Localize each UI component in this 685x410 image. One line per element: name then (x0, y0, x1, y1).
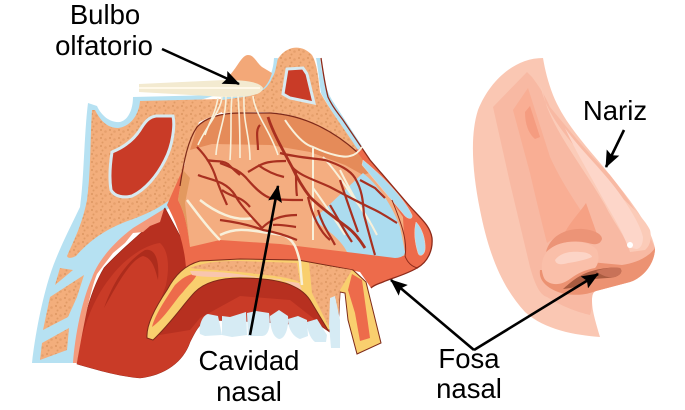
bridge highlight (540, 83, 651, 252)
throat fold (104, 250, 158, 308)
nose cartilage line (392, 200, 418, 268)
frontal bone (67, 99, 222, 258)
tip highlight dot (627, 242, 633, 248)
nostril inner tone (596, 268, 621, 277)
nostril fold (546, 229, 602, 252)
label: Cavidad nasal: nasal (216, 376, 282, 407)
olfactory nerve fan (198, 96, 278, 160)
mid skin layer (493, 72, 655, 315)
label: Nariz: Nariz (583, 95, 647, 126)
label: Fosa nasal: Fosa (438, 343, 500, 374)
arrow: olfactory bulb (162, 49, 239, 84)
nostril opening (563, 268, 621, 289)
upper mucosa band (190, 113, 372, 175)
palate yellow bone (147, 259, 381, 354)
premaxilla bone (309, 263, 352, 330)
arrow: nostril right (474, 274, 598, 350)
teeth (200, 296, 340, 348)
olfactory nerve bundle (139, 80, 263, 97)
palate marrow (152, 274, 197, 327)
left tan band (178, 170, 190, 247)
arrow: nostril left (391, 280, 474, 350)
label: Fosa nasal: nasal (436, 373, 502, 404)
lower nose rim (540, 248, 655, 295)
nose blue pockets (362, 160, 425, 255)
wing highlight (555, 252, 592, 264)
inner cheek shade (513, 88, 598, 243)
anatomical cross-section of the nose (32, 48, 432, 378)
face skin base (473, 58, 655, 337)
nasal cavity (178, 113, 405, 256)
throat (77, 208, 331, 378)
arrow: nose (606, 130, 624, 167)
nose skin (167, 113, 432, 288)
blood vessels (197, 117, 397, 255)
upper sinus (283, 68, 314, 103)
crease shade (525, 106, 540, 139)
back tissue (blue) (32, 95, 217, 363)
arrow: nasal cavity (250, 186, 278, 335)
cavity outline (180, 113, 357, 186)
nose outer line (321, 58, 432, 288)
bridge bright highlight (565, 128, 643, 249)
premaxilla marrow (348, 274, 370, 341)
label: Cavidad nasal: Cavidad (199, 345, 299, 376)
pink adenoid tissue (73, 209, 164, 363)
nose exterior illustration (473, 58, 655, 337)
throat lighter area (77, 243, 318, 378)
frontal rim blue (222, 58, 362, 150)
frontal sinus (110, 116, 174, 197)
upper nasal bone (222, 48, 358, 153)
nostril crease shade (565, 203, 598, 237)
palate pale strip (190, 271, 302, 290)
palate upper bone (190, 261, 300, 282)
nostril wing (542, 242, 598, 284)
blue vestibule (313, 173, 405, 258)
small neck bones (40, 268, 84, 360)
nerves (187, 120, 377, 285)
olfactory bulb bump (230, 55, 272, 92)
label: Bulbo olfatorio: olfatorio (55, 30, 153, 61)
